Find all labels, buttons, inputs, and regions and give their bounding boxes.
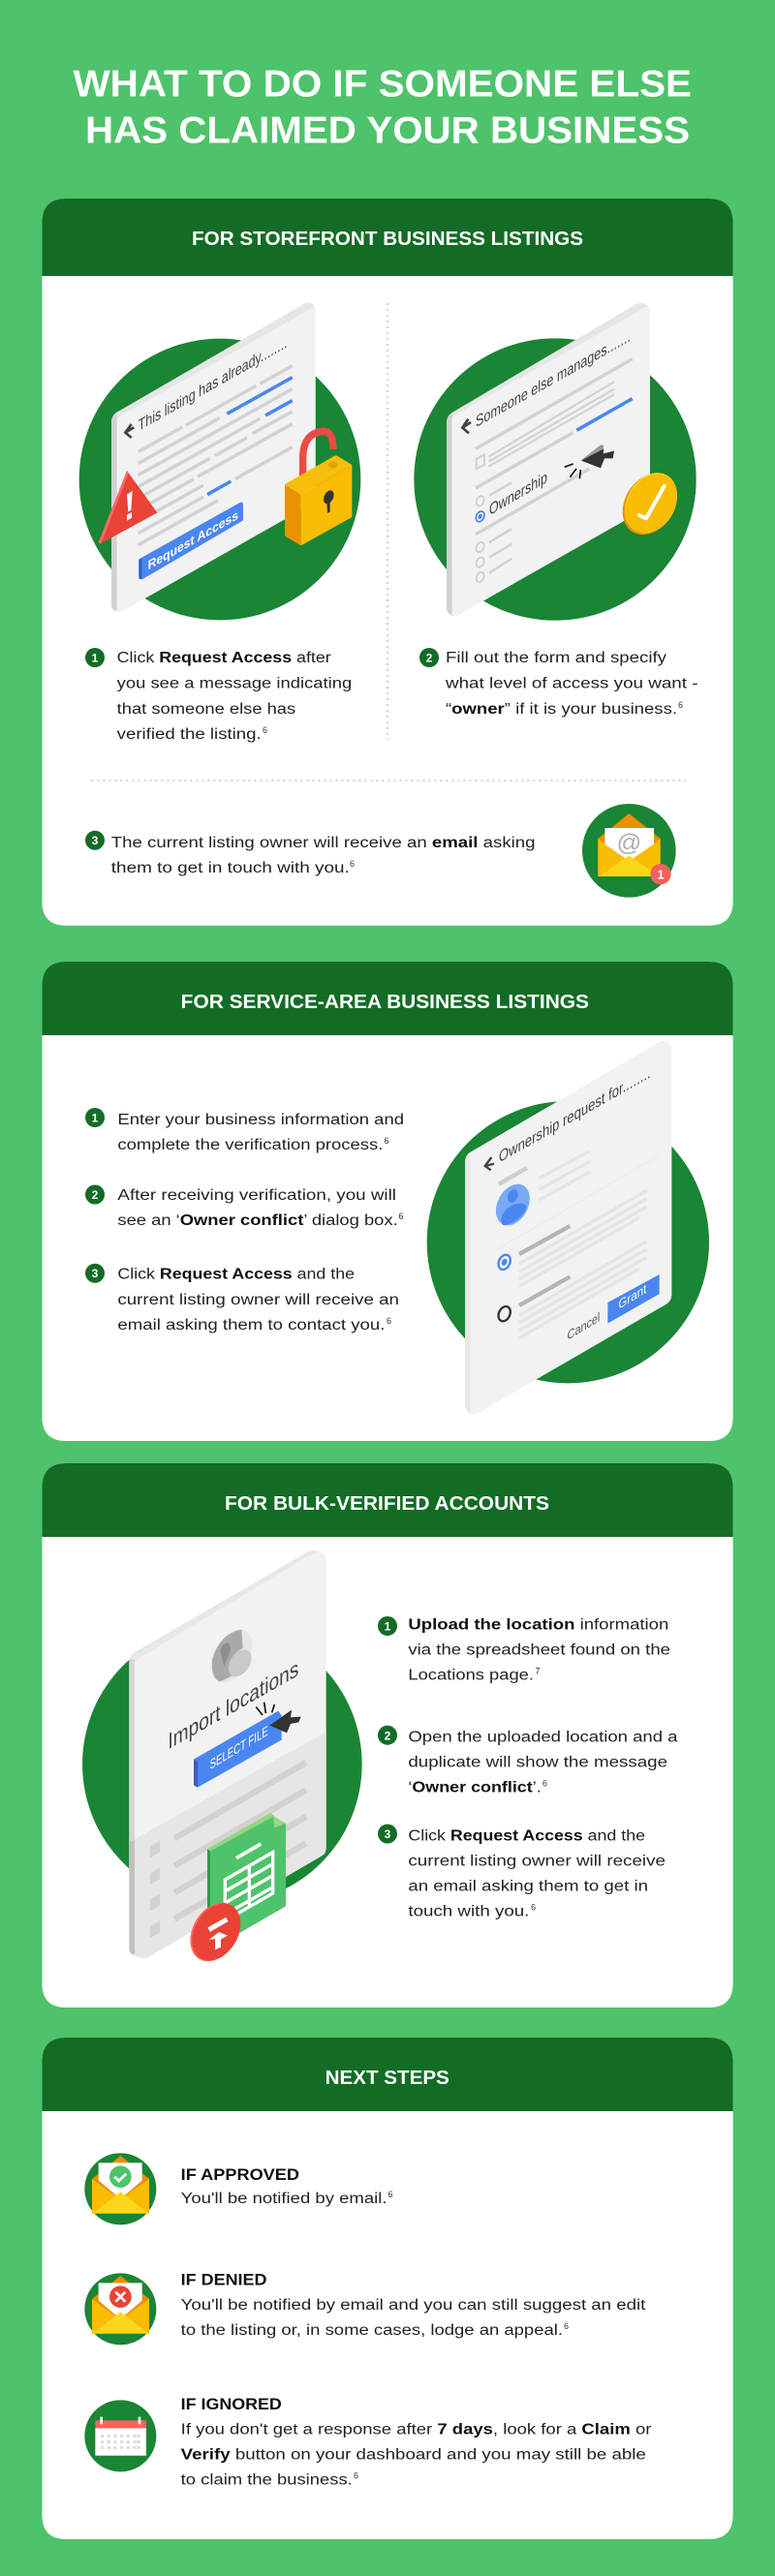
ignored text: Verify button on your dashboard and you may still be able (181, 2446, 646, 2464)
step 3 text: 6 (387, 1316, 391, 1326)
request access button: Request Access (148, 507, 238, 573)
grant button: Grant (618, 1282, 646, 1313)
icon: calendar (84, 2400, 156, 2471)
illustration: import locations (82, 1550, 362, 1970)
step 2 badge: 2 (426, 651, 433, 664)
step 1 badge (85, 648, 105, 667)
header band: service-area (42, 962, 733, 1035)
approved text: IF APPROVED (181, 2165, 299, 2184)
form lines (475, 359, 633, 583)
ignored text: IF IGNORED (181, 2395, 282, 2413)
select file button: SELECT FILE (210, 1723, 268, 1773)
approved text: You'll be notified by email. (181, 2191, 388, 2207)
grant button (607, 1274, 660, 1324)
ignored text: to claim the business. (181, 2471, 353, 2488)
step 3 text: 6 (531, 1902, 536, 1912)
step 1 text: you see a message indicating (117, 676, 352, 692)
step 1 text: 6 (263, 725, 267, 735)
avatar (489, 1179, 537, 1231)
step 3 text: email asking them to contact you. (117, 1317, 385, 1334)
ownership option label: Ownership (489, 468, 547, 519)
denied text (181, 2271, 646, 2339)
panel: bulk-verified accounts (42, 1463, 733, 2008)
step 2 text: duplicate will show the message (408, 1755, 667, 1771)
denied text: 6 (564, 2321, 569, 2331)
step 3 badge: 3 (92, 1267, 99, 1280)
icon: map pie (203, 1623, 261, 1689)
screen heading: Someone else manages....... (476, 326, 631, 431)
step 1 text: 7 (535, 1667, 541, 1676)
icon: denied envelope (84, 2273, 156, 2345)
step 2 badge (419, 648, 439, 667)
denied text: IF DENIED (181, 2271, 267, 2289)
icon: email notification: @ (616, 829, 641, 856)
step 1 text: 6 (384, 1136, 389, 1146)
step 1 text: that someone else has (117, 701, 295, 718)
cancel label: Cancel (568, 1310, 600, 1344)
radio options (496, 1253, 512, 1323)
step 2 badge: 2 (92, 1188, 99, 1202)
step 2 text (445, 650, 698, 718)
step 1 text: Upload the location information (408, 1617, 668, 1634)
step 1 text: complete the verification process. (117, 1137, 383, 1153)
step 1 text: verified the listing. (117, 726, 262, 743)
step 3 text (111, 835, 536, 876)
step 1 text: via the spreadsheet found on the (408, 1641, 670, 1658)
step 3 text: Click Request Access and the (117, 1267, 355, 1283)
icon: check coin (612, 463, 688, 544)
step 2 badge (378, 1726, 397, 1745)
header band: service-area: FOR SERVICE-AREA BUSINESS LISTINGS (181, 991, 589, 1013)
denied text: to the listing or, in some cases, lodge an appeal. (181, 2322, 563, 2339)
header band: storefront: FOR STOREFRONT BUSINESS LISTINGS (192, 228, 583, 250)
icon: approved envelope (84, 2153, 156, 2224)
panel: storefront business listings (42, 199, 733, 926)
icon: email notification: 1 (657, 868, 665, 881)
screen heading: Ownership request for........ (499, 1062, 651, 1166)
step 1 text: Locations page. (408, 1668, 534, 1684)
step 2 text: 6 (399, 1211, 404, 1221)
step 1 text (117, 650, 352, 743)
step 2 text (408, 1730, 678, 1795)
step 1 badge (378, 1616, 397, 1636)
header band: storefront (42, 199, 733, 276)
ignored text: 6 (354, 2470, 358, 2480)
step 2 text: After receiving verification, you will (117, 1187, 396, 1204)
step 3 text (117, 1267, 399, 1334)
step 3 text: 6 (350, 859, 355, 869)
step 2 text: see an ‘ Owner conflict ’ dialog box. (117, 1212, 398, 1229)
step 2 badge: 2 (385, 1729, 391, 1742)
step 3 text: current listing owner will receive an (117, 1292, 399, 1308)
step 2 text: 6 (678, 700, 683, 710)
step 1 badge: 1 (385, 1619, 391, 1633)
step 2 text: 6 (542, 1778, 547, 1788)
select file button (194, 1711, 282, 1788)
step 1 text: Enter your business information and (117, 1112, 404, 1128)
screen heading: This listing has already........ (139, 332, 288, 435)
title: WHAT TO DO IF SOMEONE ELSE (74, 64, 692, 106)
step 1 badge: 1 (92, 651, 99, 664)
step 3 badge: 3 (385, 1827, 391, 1841)
step 3 text: current listing owner will receive (408, 1854, 666, 1869)
panel: service-area business listings (42, 962, 733, 1441)
listing text lines (139, 366, 293, 545)
panel: next steps (42, 2038, 733, 2539)
ignored text (181, 2395, 651, 2488)
header band: next steps (42, 2038, 733, 2111)
step 2 text: what level of access you want - (445, 676, 698, 692)
step 1 text (408, 1617, 670, 1684)
title: HAS CLAIMED YOUR BUSINESS (85, 109, 690, 151)
step 2 text: Fill out the form and specify (446, 650, 666, 666)
step 3 text: an email asking them to get in (408, 1879, 648, 1895)
selected radio (475, 510, 486, 523)
icon: red upload badge (180, 1893, 251, 1970)
step 3 text: Click Request Access and the (408, 1827, 645, 1844)
icon: cursor (565, 445, 614, 478)
step 1 text: Click Request Access after (117, 650, 331, 666)
illustration: ownership request (427, 1041, 709, 1414)
step 1 badge: 1 (92, 1112, 99, 1125)
step 3 badge (85, 1264, 105, 1283)
denied text: You'll be notified by email and you can still suggest an edit (181, 2297, 646, 2314)
header band: bulk-verified: FOR BULK-VERIFIED ACCOUNTS (225, 1492, 549, 1515)
header band: next steps: NEXT STEPS (326, 2067, 450, 2089)
step 3 text (408, 1827, 666, 1919)
illustration: someone else manages (414, 303, 697, 621)
approved text: 6 (388, 2190, 393, 2199)
step 3 text: The current listing owner will receive an email asking (111, 835, 536, 851)
title (74, 64, 692, 151)
spreadsheet rows (174, 1763, 306, 1919)
step 2 text: Open the uploaded location and a (408, 1730, 678, 1746)
ignored text: If you don't get a response after 7 days , look for a Claim or (181, 2422, 651, 2438)
header band: bulk-verified (42, 1463, 733, 1537)
icon: warning triangle (99, 471, 157, 544)
step 3 badge (85, 831, 105, 850)
step 3 text: touch with you. (408, 1903, 529, 1919)
step 3 badge: 3 (92, 834, 99, 847)
step 3 badge (378, 1825, 397, 1844)
icon: green spreadsheet (207, 1813, 286, 1935)
step 2 badge (85, 1185, 105, 1205)
icon: cursor (256, 1702, 301, 1733)
step 2 text (117, 1187, 404, 1229)
step 2 text: ‘Owner conflict ’. (408, 1779, 542, 1795)
heading: import locations: Import locations (168, 1655, 298, 1755)
step 2 text: “owner ” if it is your business. (446, 701, 677, 718)
icon: email notification (582, 804, 676, 898)
icon: open padlock (285, 431, 352, 545)
step 1 text (117, 1112, 404, 1153)
step 3 text: them to get in touch with you. (111, 860, 350, 876)
illustration: listing already verified (79, 303, 360, 620)
step 1 badge (85, 1108, 105, 1127)
approved text (181, 2165, 393, 2207)
